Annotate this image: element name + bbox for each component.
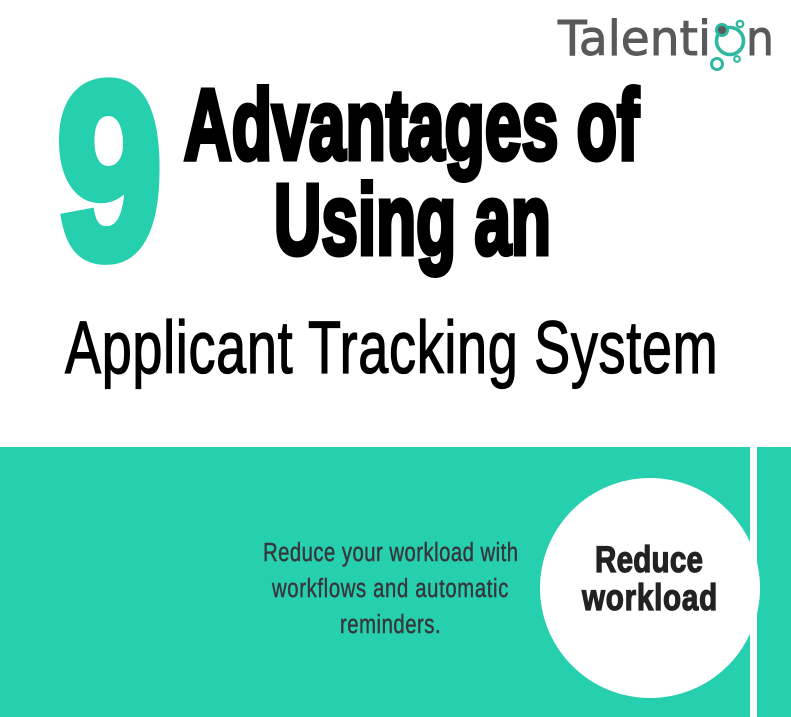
logo: Talention <box>557 11 774 70</box>
description text: Reduce your workload with <box>263 538 518 567</box>
panel background <box>0 447 791 717</box>
vertical timeline stripe <box>750 447 757 717</box>
big number 9: 9 <box>57 32 162 310</box>
description text: reminders. <box>340 610 441 639</box>
badge label <box>581 540 717 619</box>
logo bubbles <box>712 21 744 70</box>
description text <box>263 538 518 639</box>
description text: workflows and automatic <box>271 574 509 603</box>
title line 2: Using an <box>274 164 551 276</box>
badge label: Reduce <box>595 540 703 581</box>
badge label: workload <box>581 578 717 619</box>
logo final letter: n <box>746 11 774 67</box>
logo wordmark: Talenti <box>557 11 711 67</box>
white circle badge <box>540 478 760 698</box>
subtitle: Applicant Tracking System <box>65 306 718 389</box>
panel: reduce workload <box>0 447 791 717</box>
